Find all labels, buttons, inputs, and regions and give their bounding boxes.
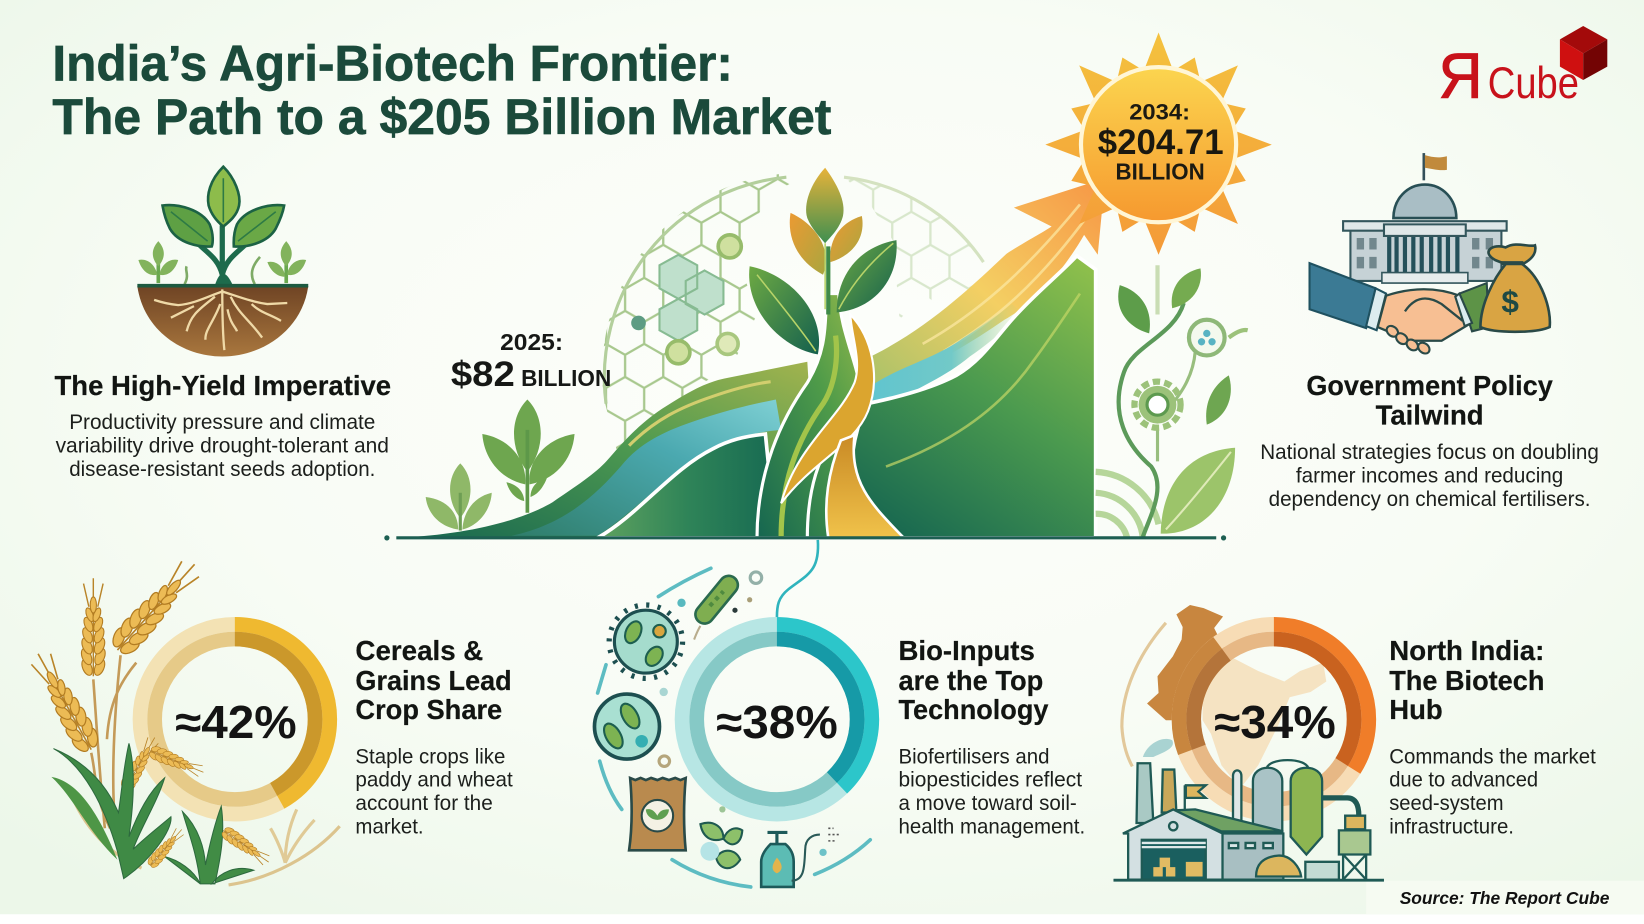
text: cereals: Staple crops like xyxy=(355,744,505,768)
text: north india: Commands the market xyxy=(1389,744,1596,768)
text: bio-inputs: are the Top xyxy=(899,665,1043,696)
logo: RCube: Cube xyxy=(1488,59,1579,108)
panel: north india xyxy=(1113,605,1596,880)
logo: RCube: Я xyxy=(1438,40,1483,112)
text: north india: seed-system xyxy=(1389,791,1504,815)
heading: high-yield imperative: disease-resistant seeds adoption. xyxy=(69,457,375,481)
hex network dome xyxy=(602,174,985,450)
title: India’s Agri-Biotech Frontier: xyxy=(52,35,733,92)
heading: high-yield imperative xyxy=(55,370,391,481)
green hill xyxy=(797,256,1096,538)
icon: wheat and rice xyxy=(24,553,340,885)
text: cereals: Grains Lead xyxy=(355,665,512,696)
sun with 2034 value: 2034: xyxy=(1129,100,1190,125)
text: bio-inputs: Technology xyxy=(899,694,1049,725)
text: north india xyxy=(1389,635,1596,839)
text: cereals: Cereals & xyxy=(355,635,483,666)
blue ribbon right xyxy=(865,304,1022,421)
text: cereals: Crop Share xyxy=(355,694,502,725)
title: The Path to a $205 Billion Market xyxy=(52,88,832,145)
icon: government and handshake xyxy=(1310,153,1550,356)
tan arc xyxy=(1122,623,1166,766)
icon: government and handshake: $ xyxy=(1501,284,1519,319)
donut: 42% xyxy=(140,624,330,814)
central plant xyxy=(749,168,904,538)
text: bio-inputs: health management. xyxy=(899,815,1085,839)
arrow ribbon xyxy=(860,178,1105,404)
text: north india: Hub xyxy=(1389,694,1443,725)
heading: government policy tailwind xyxy=(1260,370,1599,511)
sun with 2034 value: $204.71 xyxy=(1098,122,1224,162)
text: bio-inputs: biopesticides reflect xyxy=(899,768,1082,792)
value: 34%: ≈34% xyxy=(1214,696,1336,748)
baseline axis xyxy=(384,535,1226,540)
text: bio-inputs: Bio-Inputs xyxy=(899,635,1035,666)
text: north india: The Biotech xyxy=(1389,665,1544,696)
donut: 38% xyxy=(682,624,872,814)
chart: growth illustration xyxy=(384,33,1272,540)
value: 38%: ≈38% xyxy=(716,696,838,748)
2025 value xyxy=(451,329,611,394)
arrow highlight stripes xyxy=(923,204,1088,351)
sun with 2034 value xyxy=(1045,33,1272,255)
2025 value: BILLION xyxy=(521,365,611,391)
heading: government policy tailwind: farmer incomes and reducing xyxy=(1296,464,1563,488)
sun with 2034 value: BILLION xyxy=(1116,158,1205,184)
title xyxy=(52,35,832,145)
text: bio-inputs: Biofertilisers and xyxy=(899,744,1050,768)
heading: government policy tailwind: Tailwind xyxy=(1376,400,1484,431)
text: bio-inputs xyxy=(899,635,1085,839)
text: bio-inputs: a move toward soil- xyxy=(899,791,1077,815)
donut: 34% xyxy=(1179,624,1369,814)
heading: high-yield imperative: Productivity pressure and climate xyxy=(69,410,375,434)
heading: government policy tailwind: dependency on chemical fertilisers. xyxy=(1269,487,1591,511)
map of india, western part xyxy=(1147,605,1228,720)
panel: cereals and grains xyxy=(24,553,513,885)
icon: plant with roots xyxy=(137,167,308,356)
heading: high-yield imperative: The High-Yield Imperative xyxy=(55,370,391,401)
text: cereals: paddy and wheat xyxy=(355,768,513,792)
text: cereals: market. xyxy=(355,815,424,839)
2025 value: 2025: xyxy=(500,329,563,355)
connector line xyxy=(777,540,818,618)
heading: government policy tailwind: National strategies focus on doubling xyxy=(1260,440,1599,464)
right vine xyxy=(1096,265,1248,538)
sapling small xyxy=(426,463,492,531)
text: cereals: account for the xyxy=(355,791,493,815)
source note: Source: The Report Cube xyxy=(1400,888,1610,908)
blue ribbon left xyxy=(512,399,781,536)
green ribbon left xyxy=(396,362,818,538)
text: cereals xyxy=(355,635,513,839)
icon: microbes and bio products xyxy=(594,568,870,887)
text: north india: North India: xyxy=(1389,635,1544,666)
panel: bio-inputs xyxy=(594,540,1085,887)
map of india, inner tone xyxy=(1203,655,1326,788)
text: north india: infrastructure. xyxy=(1389,815,1514,839)
heading: high-yield imperative: variability drive drought-tolerant and xyxy=(56,434,389,458)
icon: factory xyxy=(1113,739,1384,880)
logo: RCube xyxy=(1438,26,1607,112)
value: 42%: ≈42% xyxy=(175,696,297,748)
sapling large xyxy=(482,399,575,513)
heading: government policy tailwind: Government Policy xyxy=(1306,370,1553,401)
2025 value: $82 xyxy=(451,354,515,394)
text: north india: due to advanced xyxy=(1389,768,1538,792)
lower green ribbon xyxy=(598,434,776,538)
